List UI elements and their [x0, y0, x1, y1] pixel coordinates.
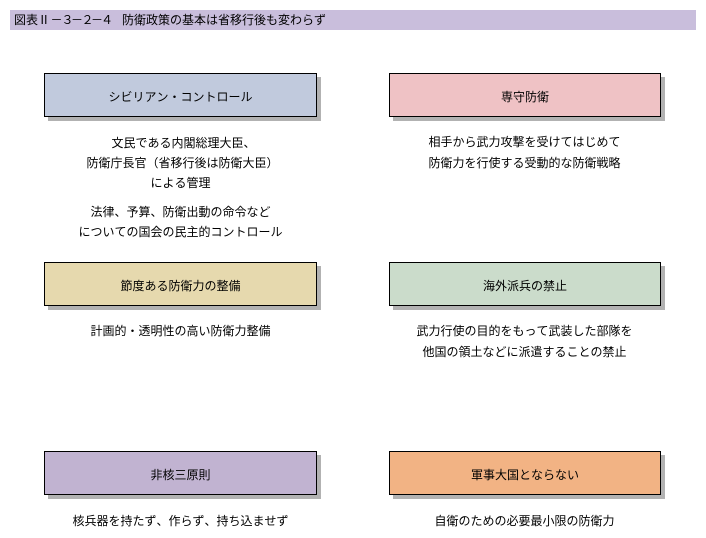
text: non-nuclear principles description: 核兵器を持たず、作らず、持ち込ませず [72, 514, 288, 528]
text: defense policy description: 相手から武力攻撃を受けてはじめて [428, 135, 620, 149]
text: overseas deployment description [416, 324, 632, 359]
panel: not becoming a military power: 軍事大国とならない [471, 468, 579, 482]
text: overseas deployment description: 武力行使の目的をもって武装した部隊を [416, 324, 632, 338]
text: civilian control by the Diet [78, 205, 282, 239]
panel: moderate defense buildup [44, 262, 317, 306]
title bar: ２ [82, 13, 94, 27]
text: overseas deployment description: 他国の領土などに派遣することの禁止 [422, 345, 626, 359]
panel: ban on overseas deployment: 海外派兵の禁止 [483, 279, 567, 293]
panel: exclusively defense-oriented policy [389, 73, 661, 117]
title bar: － [50, 13, 63, 27]
text: civilian control description: による管理 [150, 176, 210, 190]
panel: civilian control: シビリアン・コントロール [108, 90, 252, 104]
text: civilian control by the Diet: 法律、予算、防衛出動の命令など [90, 205, 270, 219]
title bar [10, 10, 696, 30]
title bar: － [71, 13, 83, 27]
text: defense buildup description: 計画的・透明性の高い防衛力整備 [90, 324, 270, 338]
panel: three non-nuclear principles [44, 451, 317, 495]
title bar: 防衛政策の基本は省移行後も変わらず [122, 13, 326, 27]
panel: exclusively defense-oriented policy: 専守防衛 [501, 90, 549, 104]
panel: three non-nuclear principles: 非核三原則 [150, 468, 210, 482]
title bar: ３ [62, 13, 74, 27]
title bar: ４ [101, 13, 113, 27]
text: defense policy description: 防衛力を行使する受動的な防衛戦略 [428, 156, 620, 170]
text: civilian control description: 文民である内閣総理大臣、 [111, 136, 256, 150]
panel: ban on overseas deployment [389, 262, 661, 306]
text: civilian control by the Diet: についての国会の民主的コントロール [78, 225, 282, 239]
panel: civilian control [44, 73, 317, 117]
title bar: Ⅱ [38, 13, 50, 27]
text: military power description: 自衛のための必要最小限の防衛力 [434, 514, 614, 528]
panel: not becoming a military power [389, 451, 661, 495]
text: civilian control description [86, 136, 278, 190]
panel: moderate defense buildup: 節度ある防衛力の整備 [120, 279, 240, 293]
title bar: － [91, 13, 103, 27]
title bar: 図表 [14, 13, 38, 27]
text: defense policy description [428, 135, 620, 170]
text: civilian control description: 防衛庁長官（省移行後は防衛大臣） [86, 156, 278, 170]
